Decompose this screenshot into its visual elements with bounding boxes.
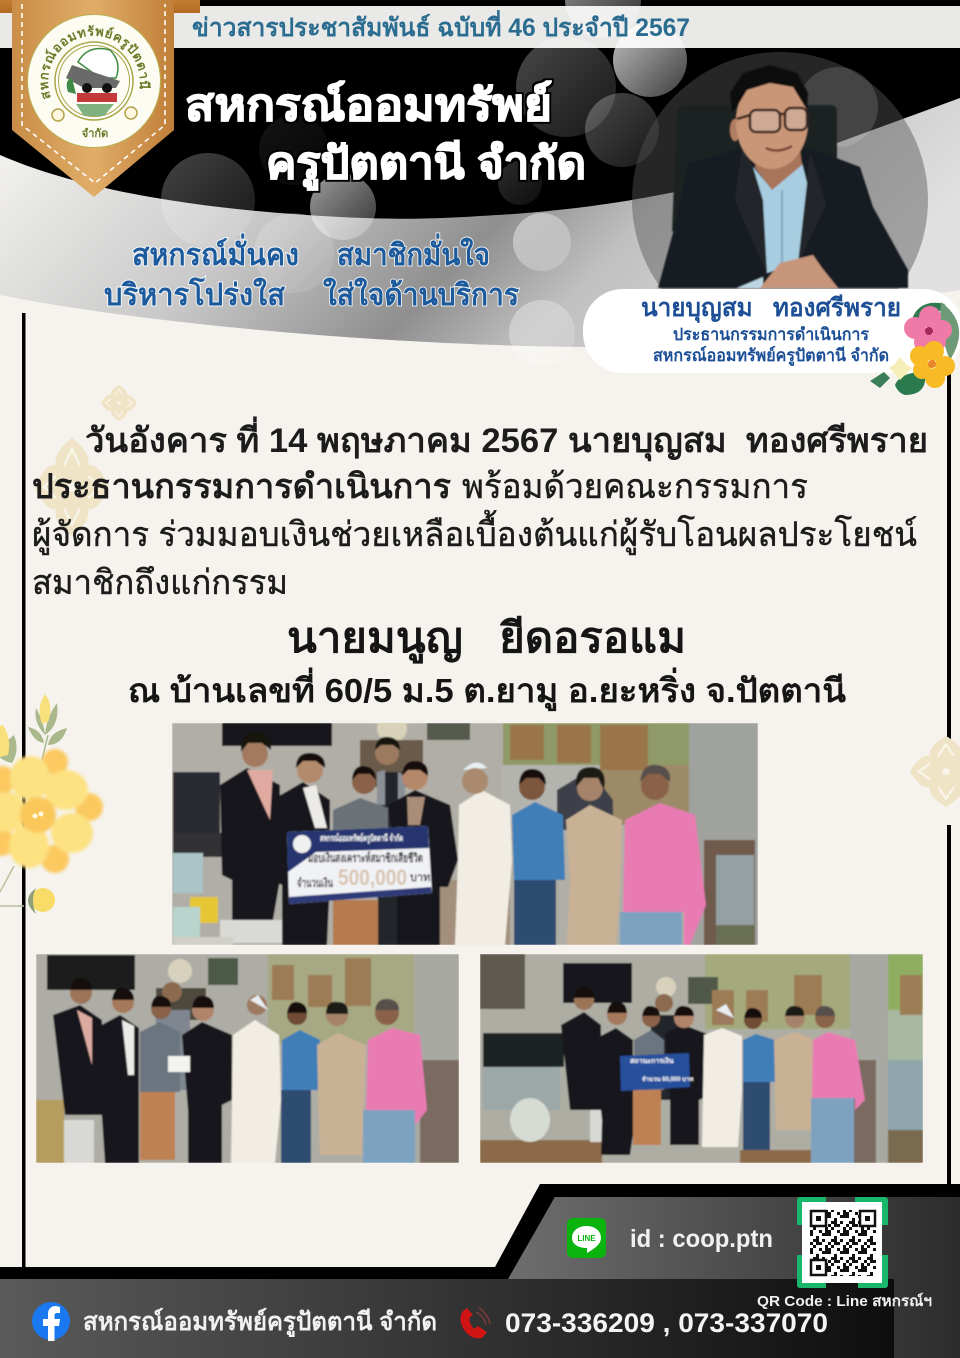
footer: bottom grey bar [0, 1279, 894, 1358]
paragraph line 2 regular: พร้อมด้วยคณะกรรมการ [462, 468, 808, 506]
shirt [753, 163, 807, 273]
ornament: large lotus [35, 438, 109, 536]
cheque board: มอบเงินสงเคราะห์สมาชิกเสียชีวิต [308, 851, 423, 865]
cheque board: จำนวนเงิน [297, 876, 334, 890]
paragraph line 3: ผู้จัดการ ร่วมมอบเงินช่วยเหลือเบื้องต้นแก่ผู้รับโอนผลประโยชน์ [32, 510, 917, 555]
body paragraph [32, 416, 928, 602]
portrait of chairman [658, 65, 908, 288]
person 2 [600, 1028, 634, 1156]
address: ณ บ้านเลขที่ 60/5 ม.5 ต.ยามู อ.ยะหริ่ง จ.ปัตตานี [128, 667, 846, 712]
person 2 [96, 1015, 139, 1163]
right vertical rule [947, 360, 951, 1185]
slogans: สมาชิกมั่นใจ [337, 233, 490, 272]
main title line 2: ครูปัตตานี จำกัด [266, 139, 586, 190]
person 4 behind [155, 1010, 190, 1090]
person 9 [623, 803, 706, 945]
paragraph line 2 bold: ประธานกรรมการดำเนินการ [32, 468, 452, 506]
lower bud [31, 888, 55, 912]
buds [40, 694, 50, 724]
person 3 [333, 798, 388, 835]
blue sign: จำนวน 60,000 บาท [642, 1075, 693, 1083]
paragraph line 1: วันอังคาร ที่ 14 พฤษภาคม 2567 นายบุญสม ทองศรีพราย [85, 416, 928, 462]
person 1 [53, 1005, 102, 1115]
person 6 [455, 790, 512, 945]
tropical flowers [870, 302, 959, 395]
chairman name plate [583, 289, 960, 395]
QR caption: QR Code : Line สหกรณ์ฯ [757, 1292, 932, 1310]
LINE icon: LINE [577, 1234, 596, 1243]
petals [0, 749, 103, 873]
slogans: ใส่ใจด้านบริการ [323, 277, 519, 312]
person 3 [634, 1030, 664, 1090]
person 1 [220, 768, 280, 920]
person 5 [182, 1022, 232, 1163]
newsletter issue line: ข่าวสารประชาสัมพันธ์ ฉบับที่ 46 ประจำปี 2567 [192, 10, 690, 42]
cheque board: บาท [410, 872, 430, 884]
person 5 [665, 1025, 710, 1145]
logo bottom text: จำกัด [82, 127, 108, 140]
person 6 [231, 1020, 281, 1163]
LINE icon [567, 1218, 606, 1258]
chair [672, 105, 837, 232]
photo: handing over cheque board [172, 713, 758, 945]
cheque board: สหกรณ์ออมทรัพย์ครูปัตตานี จำกัด [320, 832, 403, 844]
main title line 1: สหกรณ์ออมทรัพย์ [185, 80, 552, 130]
decorative bubbles [161, 0, 687, 366]
person 7 [282, 1030, 320, 1090]
person 4 behind [650, 1015, 680, 1100]
footer: upper right grey panel [508, 1197, 960, 1358]
person 8 [566, 805, 622, 945]
neck and face [755, 150, 802, 190]
QR code [800, 1200, 885, 1285]
paragraph line 4: สมาชิกถึงแก่กรรม [32, 564, 288, 602]
logo ring text: สหกรณ์ออมทรัพย์ครูปัตตานี [40, 24, 151, 100]
person 9 [812, 1032, 865, 1110]
mouth [766, 146, 792, 151]
deceased member name: นายมนูญ ยีดอรอแม [287, 614, 686, 664]
ornament: right lotus [910, 736, 960, 807]
Facebook page name: สหกรณ์ออมทรัพย์ครูปัตตานี จำกัด [83, 1307, 437, 1338]
person 7 [512, 802, 565, 880]
person 5 [388, 790, 458, 945]
person 6 [702, 1028, 742, 1147]
header background waves [0, 0, 960, 347]
ornament: upper lotus [101, 385, 137, 421]
glasses [750, 108, 807, 132]
person 9 [366, 1028, 427, 1125]
slogans [104, 233, 519, 312]
jacket [658, 148, 908, 288]
footer: black slanted frame [0, 1184, 960, 1280]
leaves and stems [0, 703, 67, 763]
hands [760, 255, 838, 288]
chairman role: ประธานกรรมการดำเนินการ [673, 325, 870, 344]
blue sign [620, 1053, 693, 1091]
phone numbers: 073-336209 , 073-337070 [505, 1308, 828, 1338]
LINE id: id : coop.ptn [630, 1225, 773, 1253]
cooperative logo [27, 14, 161, 148]
left vertical rule [22, 313, 26, 1268]
photo: group with blue sign [480, 954, 923, 1163]
person 4 behind [377, 772, 403, 945]
cheque board: 500,000 [338, 865, 407, 890]
person behind uniform [557, 770, 613, 830]
cheque board [287, 826, 432, 904]
ribbon badge [0, 0, 200, 197]
Facebook icon [32, 1302, 70, 1341]
phone icon [460, 1308, 490, 1338]
chairman organisation: สหกรณ์ออมทรัพย์ครูปัตตานี จำกัด [653, 345, 889, 367]
slogans: บริหารโปร่งใส [104, 276, 286, 312]
envelope [168, 1056, 190, 1072]
person 3 [140, 1022, 180, 1092]
yellow flower with leaves [0, 694, 103, 914]
hair [730, 65, 808, 113]
chairman name: นายบุญสม ทองศรีพราย [641, 294, 901, 324]
plant [716, 925, 754, 945]
person 8 [774, 1032, 816, 1130]
person 8 [317, 1033, 366, 1155]
slogans: สหกรณ์มั่นคง [132, 233, 299, 272]
circle behind portrait [632, 52, 928, 348]
person 1 [561, 1012, 601, 1110]
person 2 [272, 782, 330, 945]
photo: handing envelope [36, 954, 459, 1163]
person 7 [743, 1034, 775, 1082]
blue sign: สถานะการเงิน [630, 1057, 674, 1065]
